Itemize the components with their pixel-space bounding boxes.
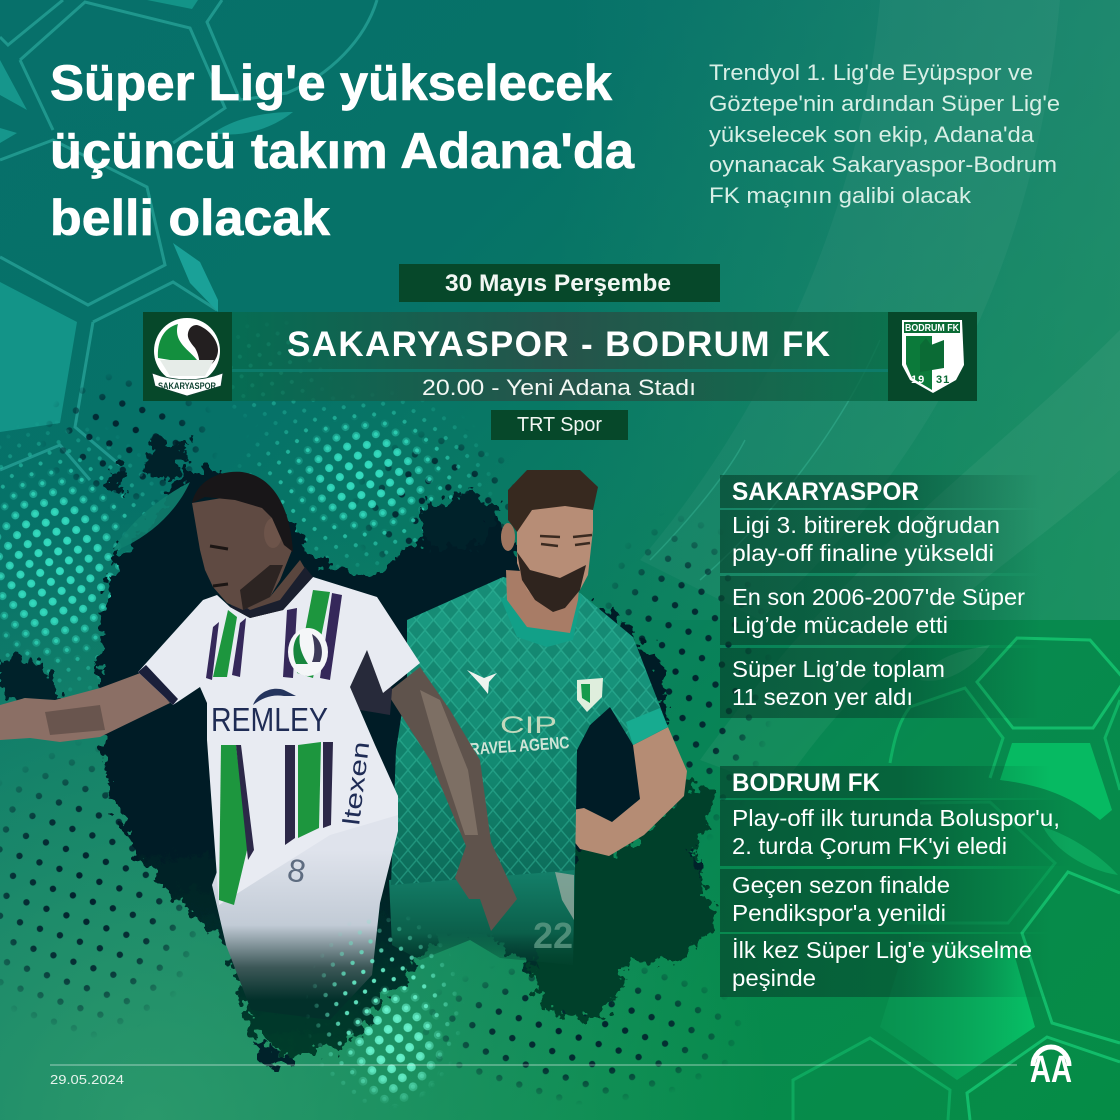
right arm and hand [387, 667, 517, 931]
sponsor: travel agency: RAVEL AGENC [469, 733, 570, 759]
item 3: 11 sezon yer aldı [732, 684, 913, 710]
intro paragraph: FK maçının galibi olacak [709, 183, 972, 208]
eyes [540, 535, 592, 546]
logo: Bodrum FK: BODRUM FK [905, 323, 960, 334]
item 3 [720, 648, 1040, 718]
jersey [138, 577, 420, 905]
beard [517, 552, 586, 612]
club crest [577, 678, 603, 712]
title: Süper Lig'e yükselecek [50, 55, 612, 111]
stripes lower [219, 745, 248, 905]
ear [264, 518, 282, 548]
neck [243, 560, 310, 618]
logo: Bodrum FK [888, 312, 977, 401]
item 2: En son 2006-2007'de Süper [732, 584, 1025, 610]
title: üçüncü takım Adana'da [50, 123, 635, 179]
background: soccer ball lines top left [0, 0, 377, 480]
sponsor: CIP: CIP [500, 712, 557, 739]
item 1: 2. turda Çorum FK'yi eledi [732, 833, 1007, 859]
club crest [288, 628, 328, 676]
shorts number: 8 [285, 851, 309, 890]
halftone dots: dark [0, 376, 768, 1102]
eye and mouth [210, 546, 228, 586]
sponsor: Altexen: ltexen [338, 740, 375, 827]
item 2: Geçen sezon finalde [732, 872, 950, 898]
right arm [544, 727, 687, 856]
item 3: Süper Lig’de toplam [732, 656, 945, 682]
logo: Sakaryaspor [143, 312, 232, 401]
item 2: Pendikspor'a yenildi [732, 900, 946, 926]
splatter leaf highlight [112, 482, 190, 552]
item 2: Lig’de mücadele etti [732, 612, 948, 638]
heading [720, 475, 1040, 508]
broadcaster tag [491, 410, 628, 440]
match bar: 20.00 - Yeni Adana Stadı [422, 375, 696, 400]
title: belli olacak [50, 190, 330, 246]
broadcaster tag: TRT Spor [517, 414, 602, 436]
item 1 [720, 510, 1040, 573]
heading: BODRUM FK [732, 769, 880, 797]
logo: Bodrum FK: 31 [936, 374, 950, 386]
footer rule [50, 1064, 1017, 1066]
item 3: İlk kez Süper Lig'e yükselme [732, 937, 1032, 963]
item 2 [720, 576, 1040, 645]
item 3: peşinde [732, 965, 816, 991]
arm highlight [420, 690, 478, 835]
intro paragraph: yükselecek son ekip, Adana'da [709, 122, 1035, 147]
intro paragraph: oynanacak Sakaryaspor-Bodrum [709, 152, 1057, 177]
panel: Sakaryaspor [720, 475, 1040, 718]
collar [230, 567, 313, 618]
hair [508, 470, 598, 532]
puma logo [467, 670, 497, 694]
sponsor: dolphin [253, 689, 296, 705]
date bar [399, 264, 720, 302]
heading: SAKARYASPOR [732, 478, 919, 506]
face [192, 495, 292, 610]
item 1: Play-off ilk turunda Boluspor'u, [732, 805, 1060, 831]
item 3 [720, 934, 1050, 997]
intro paragraph: Trendyol 1. Lig'de Eyüpspor ve [709, 60, 1033, 85]
item 1: play-off finaline yükseldi [732, 540, 994, 566]
neck [506, 570, 580, 633]
match bar [232, 312, 888, 401]
match bar: SAKARYASPOR - BODRUM FK [287, 325, 830, 364]
halftone dots over players bottom [307, 918, 460, 1103]
armhole shade [350, 650, 392, 715]
icon: Anadolu Agency logo: AA [1030, 1049, 1072, 1091]
body and shorts [207, 700, 398, 1020]
item 1: Ligi 3. bitirerek doğrudan [732, 512, 1000, 538]
leg [555, 872, 574, 920]
date stamp: 29.05.2024 [50, 1072, 124, 1087]
sleeve trim [138, 665, 178, 705]
armband [626, 708, 668, 745]
jersey [391, 577, 668, 885]
face [517, 505, 593, 612]
intro paragraph [709, 60, 1060, 208]
left arm [0, 672, 170, 742]
stripes upper [213, 590, 330, 678]
date bar: 30 Mayıs Perşembe [445, 270, 671, 297]
face shadow [240, 565, 283, 610]
player: Bodrum FK footballer [389, 470, 687, 965]
shirt number: 22 [533, 915, 573, 956]
intro paragraph: Göztepe'nin ardından Süper Lig'e [709, 91, 1060, 116]
ink splatter behind the players [0, 440, 716, 1070]
background: soccer ball hexagons bottom right [793, 638, 1120, 1120]
item 1 [720, 800, 1070, 866]
ear [501, 523, 515, 551]
shorts [389, 860, 575, 965]
title [50, 55, 635, 246]
arm tattoo [45, 705, 105, 735]
collar [500, 595, 582, 647]
item 2 [720, 869, 1050, 932]
player: Sakaryaspor footballer [0, 472, 517, 1020]
logo: Bodrum FK: 19 [911, 374, 925, 386]
panel: Bodrum FK [720, 766, 1070, 997]
hair [192, 472, 293, 552]
logo: Sakaryaspor: SAKARYASPOR [158, 381, 216, 391]
heading [720, 766, 1050, 798]
halftone dots: cyan [0, 332, 492, 692]
sponsor: Kremley: REMLEY [211, 701, 328, 738]
